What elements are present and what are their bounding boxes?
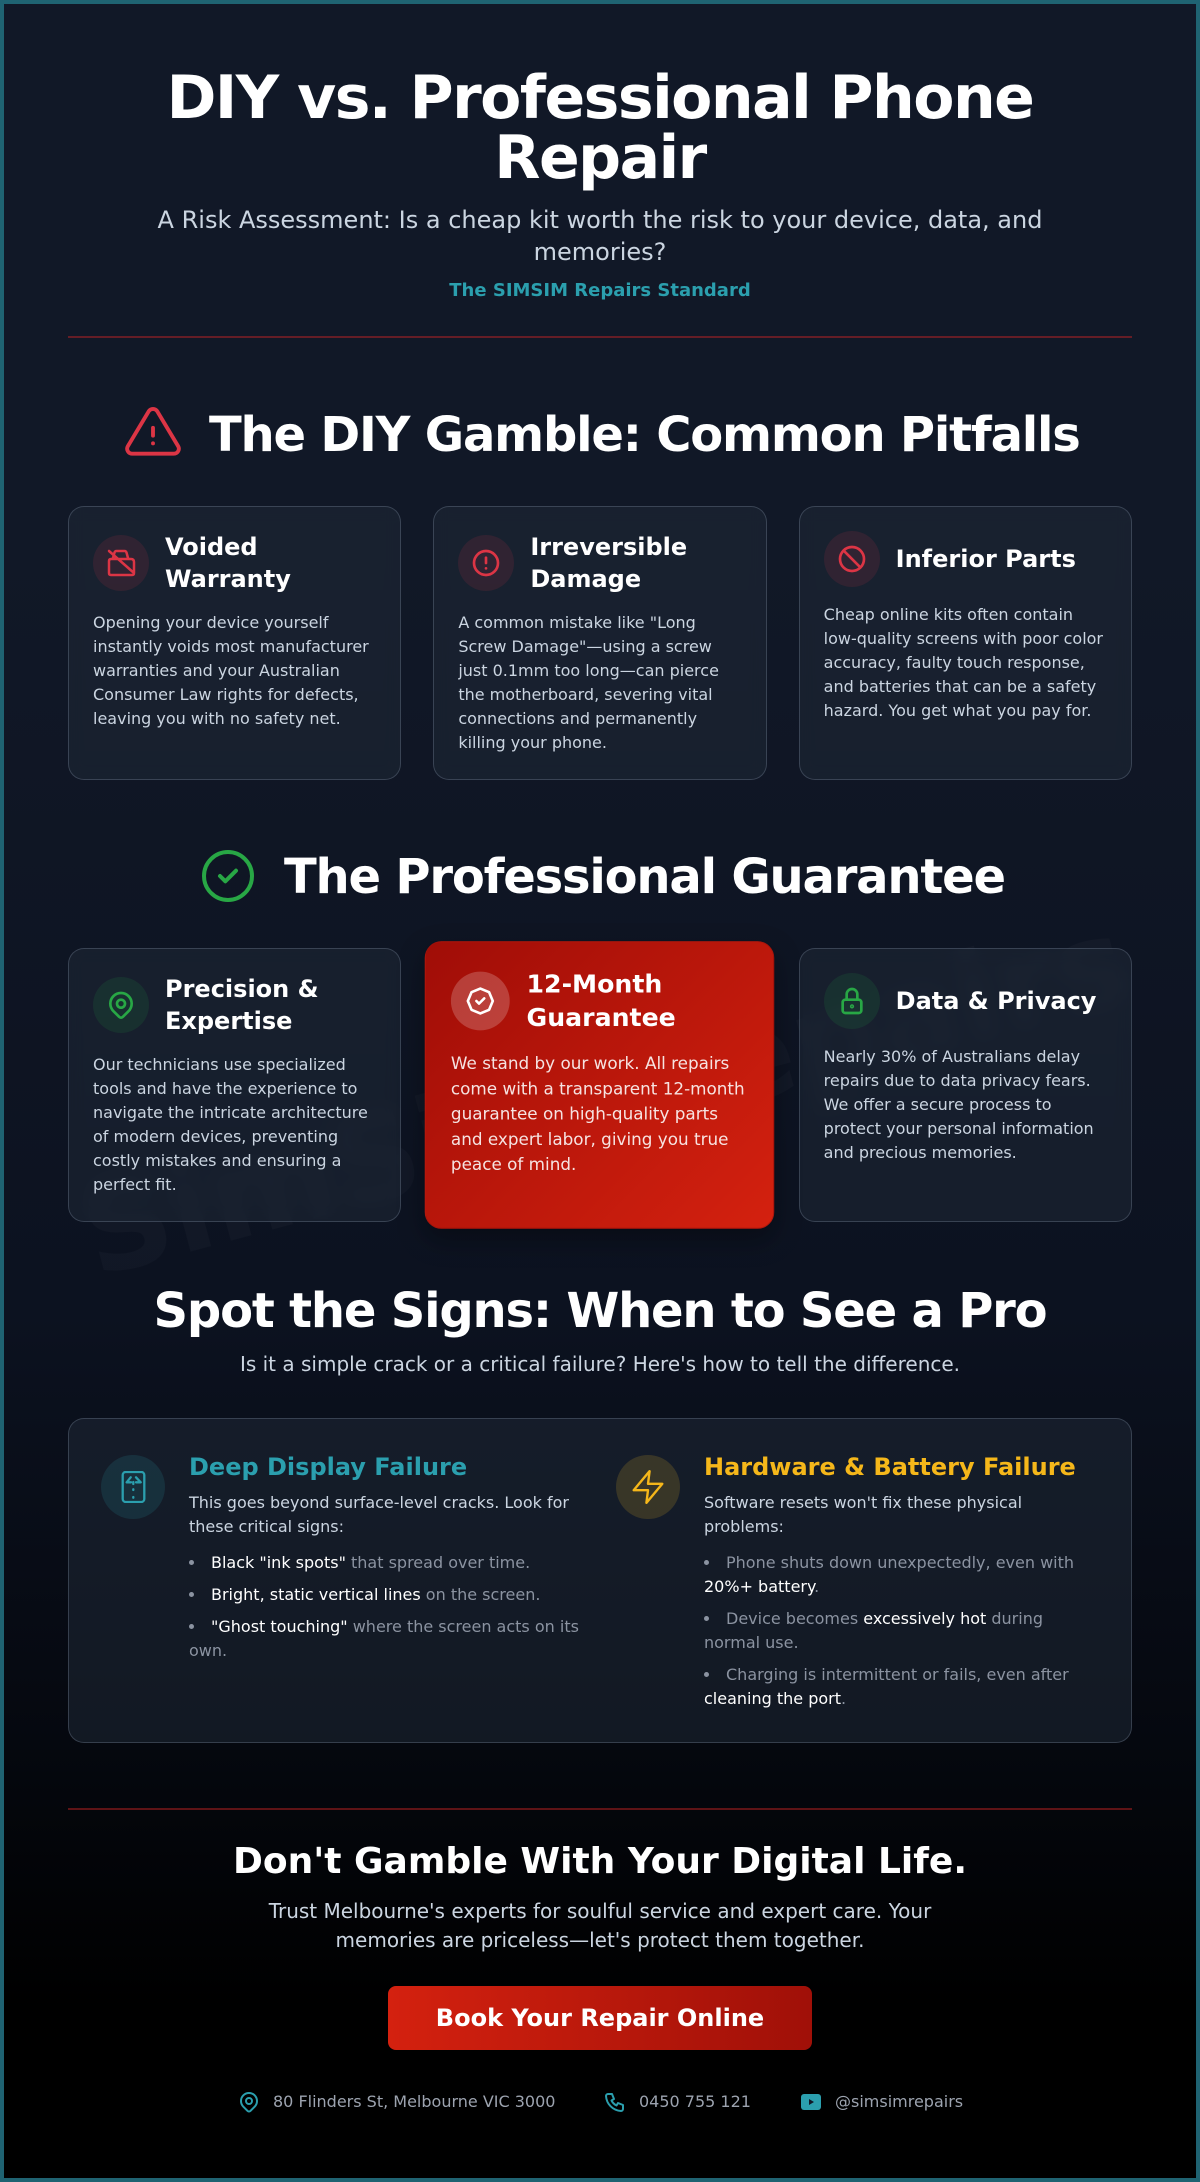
icon: map pin — [93, 977, 149, 1033]
heading: voided warranty: Voided — [165, 533, 258, 561]
icon: lightning bolt — [616, 1455, 680, 1519]
text: hardware and battery failure: Hardware & Battery Failure — [704, 1453, 1076, 1481]
panel: irreversible damage — [433, 506, 767, 780]
text: voided warranty: warranties and your Australian — [93, 661, 340, 680]
text: voided warranty — [93, 613, 369, 728]
icon: rosette check — [451, 972, 510, 1030]
heading: precision — [165, 975, 319, 1035]
text: spot the signs intro: Is it a simple crack or a critical failure? Here's how to tell the difference. — [240, 1352, 960, 1376]
text: hardware and battery failure: Software resets won't fix these physical — [704, 1493, 1022, 1512]
icon: warning triangle — [125, 407, 181, 456]
footer: social: @simsimrepairs — [835, 2092, 963, 2111]
heading: 12-month guarantee: Guarantee — [527, 1003, 676, 1032]
icon: voided box — [93, 535, 149, 591]
text: deep display failure: "Ghost touching" where the screen acts on its — [211, 1617, 579, 1636]
heading: professional guarantee: The Professional Guarantee — [284, 849, 1005, 905]
text: 12-month guarantee: come with a transparent 12-month — [451, 1079, 745, 1099]
text: hardware and battery failure: normal use. — [704, 1633, 799, 1652]
text: data and privacy: We offer a secure process to — [824, 1095, 1052, 1114]
text: voided warranty: instantly voids most manufacturer — [93, 637, 369, 656]
watermark: SimSim Repairs — [66, 889, 1144, 1305]
heading: inferior parts: Inferior Parts — [896, 545, 1076, 573]
title: Repair — [494, 123, 706, 193]
text: precision — [93, 1055, 368, 1194]
text: call to action: Trust Melbourne's experts for soulful service and expert care. Your — [269, 1899, 931, 1923]
text: irreversible damage — [458, 613, 719, 752]
text: precision: perfect fit. — [93, 1175, 177, 1194]
button: book repair — [388, 1986, 812, 2050]
heading: precision: Precision & — [165, 975, 319, 1003]
text: hardware and battery failure: 20%+ battery. — [704, 1577, 819, 1596]
text: inferior parts: and batteries that can be a safety — [824, 677, 1096, 696]
text: precision: navigate the intricate architecture — [93, 1103, 368, 1122]
text: irreversible damage: connections and permanently — [458, 709, 697, 728]
panel: precision — [68, 948, 401, 1222]
text: irreversible damage: A common mistake like "Long — [458, 613, 696, 632]
text: precision: tools and have the experience to — [93, 1079, 357, 1098]
title — [167, 63, 1033, 193]
text: 12-month guarantee: We stand by our work. All repairs — [451, 1054, 730, 1073]
text: precision: of modern devices, preventing — [93, 1127, 338, 1146]
icon: lock — [824, 973, 880, 1029]
text: deep display failure: own. — [189, 1641, 227, 1660]
text: voided warranty: Consumer Law rights for defects, — [93, 685, 359, 704]
text: deep display failure: This goes beyond surface-level cracks. Look for — [189, 1493, 569, 1512]
panel: voided warranty — [68, 506, 401, 780]
heading: DIY gamble: The DIY Gamble: Common Pitfalls — [209, 407, 1080, 463]
text: deep display failure: Bright, static vertical lines on the screen. — [211, 1585, 540, 1604]
footer: phone: 0450 755 121 — [639, 2092, 751, 2111]
text: call to action — [268, 1899, 932, 1952]
panel: 12-month guarantee — [425, 941, 775, 1229]
footer: address: 80 Flinders St, Melbourne VIC 3000 — [273, 2092, 555, 2111]
icon: check circle — [202, 850, 254, 902]
heading: data and privacy: Data & Privacy — [896, 987, 1096, 1015]
text: voided warranty: leaving you with no safety net. — [93, 709, 341, 728]
text: data and privacy — [824, 1047, 1094, 1162]
text: deep display failure: Black "ink spots" that spread over time. — [211, 1553, 530, 1572]
text: call to action: memories are priceless—let's protect them together. — [336, 1928, 864, 1952]
button: book repair: Book Your Repair Online — [436, 2004, 764, 2032]
text: hardware and battery failure: problems: — [704, 1517, 784, 1536]
panel: data and privacy — [799, 948, 1132, 1222]
heading: irreversible damage — [530, 533, 687, 593]
text: 12-month guarantee — [451, 1054, 745, 1174]
text: 12-month guarantee: and expert labor, giving you true — [451, 1129, 729, 1149]
heading: 12-month guarantee — [527, 970, 676, 1032]
text: 12-month guarantee: guarantee on high-quality parts — [451, 1104, 718, 1124]
text: irreversible damage: just 0.1mm too long—can pierce — [458, 661, 719, 680]
heading: irreversible damage: Irreversible — [530, 533, 687, 561]
text: deep display failure: Deep Display Failure — [189, 1453, 467, 1481]
title: DIY vs. Professional Phone — [167, 63, 1033, 133]
text: hardware and battery failure: Charging is intermittent or fails, even after — [726, 1665, 1069, 1684]
heading: voided warranty — [165, 533, 291, 593]
text: hardware and battery failure: Phone shuts down unexpectedly, even with — [726, 1553, 1074, 1572]
panel: inferior parts — [799, 506, 1132, 780]
column: deep display failure — [101, 1453, 579, 1660]
icon: ban — [824, 531, 880, 587]
text: hardware and battery failure: cleaning the port. — [704, 1689, 846, 1708]
text: hardware and battery failure — [704, 1453, 1076, 1708]
text: voided warranty: Opening your device yourself — [93, 613, 328, 632]
text: inferior parts: accuracy, faulty touch response, — [824, 653, 1085, 672]
text: inferior parts: hazard. You get what you pay for. — [824, 701, 1091, 720]
text: hardware and battery failure: Device becomes excessively hot during — [726, 1609, 1043, 1628]
text: precision: costly mistakes and ensuring a — [93, 1151, 341, 1170]
text: irreversible damage: the motherboard, severing vital — [458, 685, 713, 704]
text: deep display failure — [188, 1453, 579, 1660]
text: irreversible damage: killing your phone. — [458, 733, 607, 752]
heading: voided warranty: Warranty — [165, 565, 291, 593]
text: precision: Our technicians use specialized — [93, 1055, 346, 1074]
heading: irreversible damage: Damage — [530, 565, 641, 593]
text: data and privacy: repairs due to data privacy fears. — [824, 1071, 1091, 1090]
text: inferior parts: Cheap online kits often contain — [824, 605, 1073, 624]
subtitle — [158, 206, 1042, 266]
text: data and privacy: protect your personal information — [824, 1119, 1094, 1138]
text: deep display failure: these critical signs: — [189, 1517, 344, 1536]
text: data and privacy: and precious memories. — [824, 1143, 1017, 1162]
subtitle: memories? — [534, 238, 666, 266]
text: inferior parts — [824, 605, 1103, 720]
text: inferior parts: low-quality screens with poor color — [824, 629, 1103, 648]
heading: spot the signs: Spot the Signs: When to See a Pro — [154, 1283, 1046, 1339]
text: irreversible damage: Screw Damage"—using a screw — [458, 637, 712, 656]
heading: 12-month guarantee: 12-Month — [527, 970, 663, 999]
icon: cracked phone — [101, 1455, 165, 1519]
tagline: The SIMSIM Repairs Standard — [449, 280, 751, 301]
panel: failure signs — [68, 1418, 1132, 1743]
icon: alert circle — [458, 535, 514, 591]
subtitle: A Risk Assessment: Is a cheap kit worth the risk to your device, data, and — [158, 206, 1042, 234]
column: hardware and battery failure — [616, 1453, 1076, 1708]
text: data and privacy: Nearly 30% of Australians delay — [824, 1047, 1080, 1066]
heading: call to action: Don't Gamble With Your Digital Life. — [233, 1841, 967, 1882]
heading: precision: Expertise — [165, 1007, 292, 1035]
text: 12-month guarantee: peace of mind. — [451, 1154, 577, 1174]
